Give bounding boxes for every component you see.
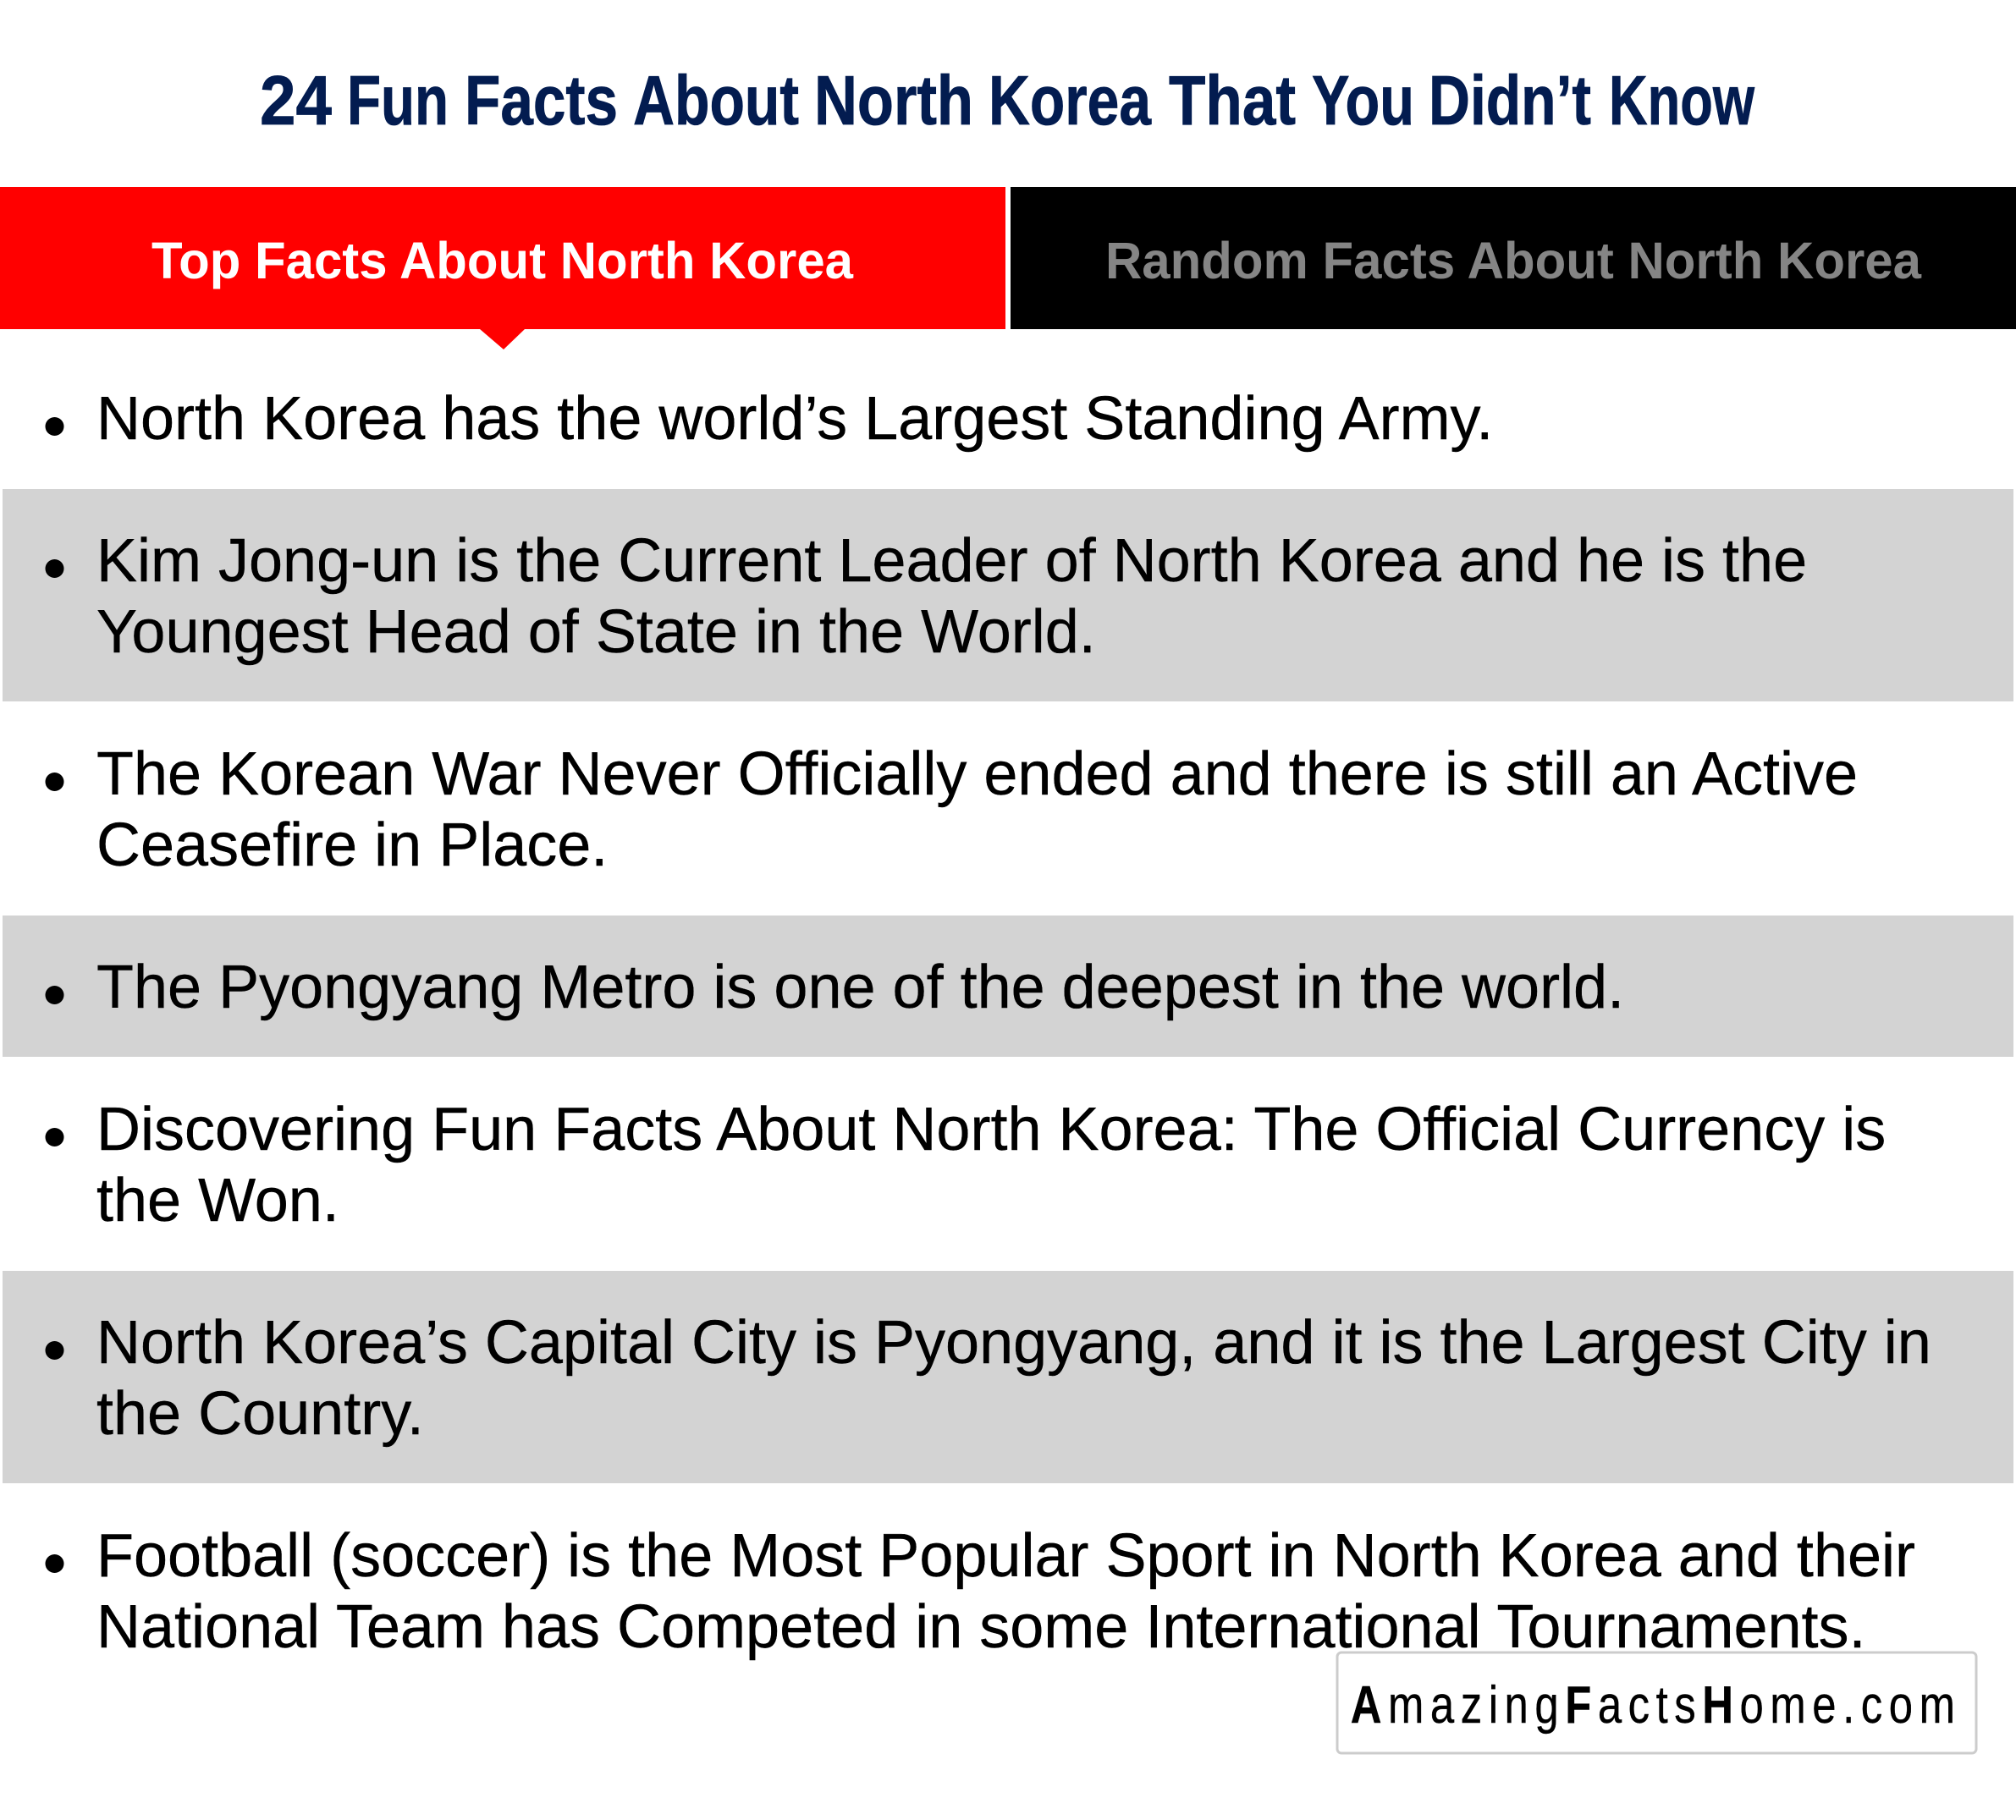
fact 3: active ceasefire: Ceasefire in Place. <box>96 811 608 879</box>
fact 6: capital city: North Korea’s Capital City is Pyongyang, and it is the Largest City in <box>96 1309 1931 1377</box>
tab: random facts (inactive) <box>1011 187 2016 329</box>
fact 7: football: Football (soccer) is the Most Popular Sport in North Korea and their <box>96 1522 1915 1590</box>
fact 4: pyongyang metro: The Pyongyang Metro is one of the deepest in the world. <box>96 954 1624 1021</box>
title: Know <box>1609 61 1754 140</box>
title: You <box>1312 61 1414 140</box>
watermark badge: AmazingFactsHome.com <box>1351 1676 1955 1735</box>
fact 3: active ceasefire <box>46 740 1858 879</box>
title: 24 <box>260 61 332 140</box>
fact 2: youngest head of state: Kim Jong-un is the Current Leader of North Korea and he is the <box>96 527 1807 595</box>
fact 5: official currency: the Won. <box>96 1167 339 1234</box>
tab: random facts (inactive): Random Facts About North Korea <box>1105 232 1922 289</box>
fact 6: capital city: the Country. <box>96 1380 424 1448</box>
title: North <box>814 61 973 140</box>
fact 5: official currency <box>46 1096 1886 1234</box>
title <box>260 61 1754 140</box>
tab: top facts (active): Top Facts About North Korea <box>151 232 854 289</box>
fact 2: youngest head of state: Youngest Head of State in the World. <box>96 598 1096 666</box>
fact 7: football <box>46 1522 1915 1661</box>
title: Facts <box>465 61 618 140</box>
fact 2: youngest head of state <box>3 489 2013 701</box>
fact 3: active ceasefire: The Korean War Never Officially ended and there is still an Active <box>96 740 1858 808</box>
title: Korea <box>989 61 1152 140</box>
fact 7: football: National Team has Competed in some International Tournaments. <box>96 1593 1866 1661</box>
watermark badge <box>1337 1652 1976 1753</box>
title: That <box>1169 61 1296 140</box>
fact 5: official currency: Discovering Fun Facts About North Korea: The Official Currency is <box>96 1096 1886 1163</box>
tab: top facts (active) <box>0 187 1005 349</box>
title: About <box>633 61 799 140</box>
title: Fun <box>347 61 449 140</box>
title: Didn’t <box>1429 61 1591 140</box>
fact 4: pyongyang metro <box>3 915 2013 1057</box>
fact 1: largest standing army: North Korea has the world’s Largest Standing Army. <box>96 385 1493 453</box>
fact 6: capital city <box>3 1271 2013 1483</box>
